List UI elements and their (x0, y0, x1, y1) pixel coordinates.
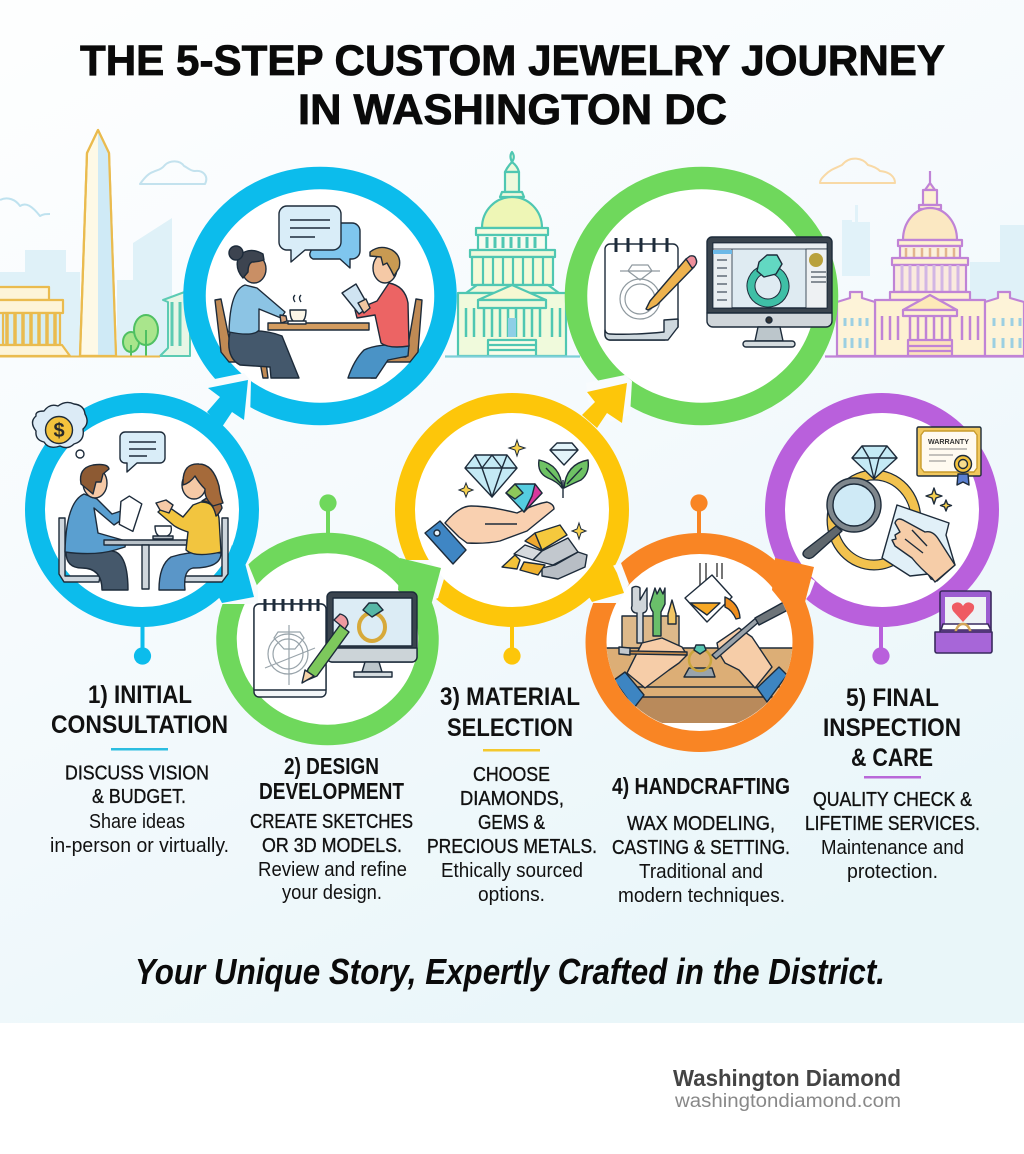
text block: step 1: DISCUSS VISION (65, 762, 209, 784)
heading: step 2: 2) DESIGN (284, 753, 379, 779)
ring: step top green (3D design) (576, 178, 827, 422)
right capitol (825, 171, 1024, 356)
text block: step 1: in-person or virtually. (50, 835, 229, 857)
pin: step 1 (134, 625, 151, 665)
text block: step 3: options. (478, 884, 545, 906)
skyline: Washington DC landmarks (0, 130, 1024, 356)
arrow: yellow head into step 4 (585, 550, 624, 602)
heading: step 5: 5) FINAL (846, 684, 939, 712)
heading: step 1 (51, 681, 228, 739)
ring: step top blue (consultation) (194, 178, 446, 427)
ring: yellow step 3 (388, 403, 619, 617)
clouds (0, 159, 895, 216)
icon: consultation, step 1 (32, 402, 228, 590)
arrow: orange head into step 5 (772, 558, 814, 612)
title: IN WASHINGTON DC (298, 86, 727, 134)
ring: orange step 4 (590, 544, 803, 742)
heading: step 3: 3) MATERIAL (440, 683, 580, 711)
text block: step 4: CASTING & SETTING. (612, 837, 790, 859)
small teal building (160, 290, 190, 356)
arrow: step 3 up to green circle (582, 383, 627, 428)
silver and gold bars (502, 525, 587, 579)
icon: warranty certificate: WARRANTY (928, 437, 969, 446)
title: THE 5-STEP CUSTOM JEWELRY JOURNEY (80, 37, 945, 85)
pin: step 2 (319, 494, 337, 535)
Washington monument (80, 130, 116, 356)
arrow: green head into step 3 (398, 558, 441, 612)
text block: step 5: protection. (847, 861, 938, 883)
text block: step 3: DIAMONDS, (460, 788, 564, 810)
heading: step 5 (823, 684, 961, 772)
text block: step 4: Traditional and (639, 861, 763, 883)
heading: step 1: CONSULTATION (51, 711, 228, 739)
ring: green step 2 (218, 543, 428, 735)
arrow: blue head into step 2 (215, 545, 254, 603)
footer brand: washingtondiamond.com (674, 1091, 901, 1112)
heading: step 4: 4) HANDCRAFTING (612, 773, 790, 799)
icon: ring box (935, 591, 992, 653)
heading: step 5: INSPECTION (823, 714, 961, 742)
text block: step 3: PRECIOUS METALS. (427, 836, 597, 858)
heading: step 5: & CARE (851, 744, 933, 772)
text block: step 2: CREATE SKETCHES (250, 811, 413, 833)
text block: step 2 (250, 753, 413, 904)
arrow: step 1 to blue circle (207, 380, 248, 427)
icon: warranty certificate (917, 427, 981, 485)
text block: step 3: Ethically sourced (441, 860, 583, 882)
ring: purple step 5 (762, 403, 989, 620)
icon: sparkles, step 3 (459, 440, 586, 539)
center capitol (445, 152, 580, 356)
icon: consultation, step 1: $ (54, 420, 65, 442)
text block: step 4: WAX MODELING, (627, 813, 775, 835)
icon: couple at table, top blue circle (215, 206, 422, 378)
text block: step 5: QUALITY CHECK & (813, 789, 973, 811)
pin: step 5 (872, 625, 890, 665)
ground line (0, 356, 160, 358)
icon: sketch and monitor, top green circle (605, 237, 832, 347)
text block: step 1: & BUDGET. (92, 786, 186, 808)
text block: step 3: CHOOSE (473, 764, 550, 786)
pin: step 3 (503, 625, 521, 665)
heading: step 3: SELECTION (447, 714, 573, 742)
text block: step 4: modern techniques. (618, 885, 785, 907)
text block: step 2: Review and refine (258, 859, 407, 881)
icon: sketch and monitor, step 2 (254, 592, 417, 697)
text block: step 5: LIFETIME SERVICES. (805, 813, 980, 835)
text block: step 3: GEMS & (478, 812, 546, 834)
text block: step 1 (50, 681, 229, 857)
text block: step 5: Maintenance and (821, 837, 964, 859)
text block: step 3 (427, 683, 597, 906)
heading: step 1: 1) INITIAL (88, 681, 192, 709)
text block: step 4 (612, 773, 790, 907)
text block: step 1: Share ideas (89, 811, 185, 833)
pin: step 4 (690, 494, 708, 535)
icon: handcrafting, step 4 (606, 563, 792, 723)
trees (123, 315, 158, 356)
footer brand: Washington Diamond (673, 1065, 901, 1091)
ring: blue step 1 (35, 403, 249, 617)
heading: step 3 (440, 683, 580, 742)
heading: step 2 (259, 753, 404, 804)
icon: hand with gems and bars, step 3 (425, 443, 588, 579)
heading: step 2: DEVELOPMENT (259, 778, 404, 804)
text block: step 2: OR 3D MODELS. (262, 835, 402, 857)
footer brand (673, 1065, 901, 1112)
icon: inspection, step 5 (803, 446, 955, 582)
text block: step 5 (805, 684, 980, 883)
pale background buildings (0, 205, 1024, 356)
text block: step 2: your design. (282, 882, 382, 904)
tagline: Your Unique Story, Expertly Crafted in the District. (135, 951, 885, 992)
Lincoln memorial (0, 287, 70, 356)
title (80, 37, 945, 134)
